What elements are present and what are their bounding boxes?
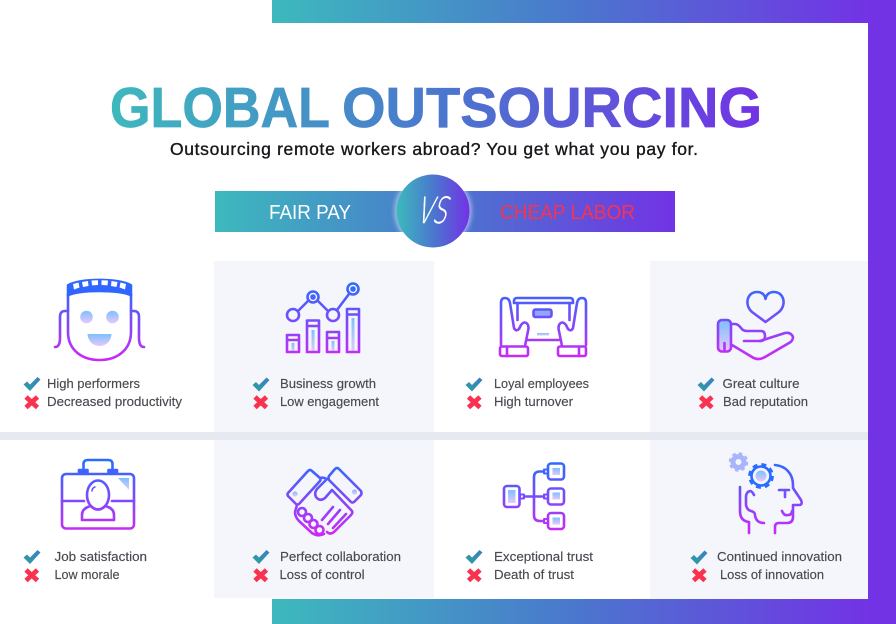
cross mark xyxy=(694,570,705,580)
text: low engagement: Low engagement xyxy=(280,394,379,409)
text: business growth: Business growth xyxy=(280,376,376,391)
text: great culture: Great culture xyxy=(722,376,800,391)
vs badge: VS xyxy=(413,190,456,232)
text: loss of control: Loss of control xyxy=(280,567,365,582)
text: bad reputation: Bad reputation xyxy=(723,394,808,409)
panel background xyxy=(214,261,434,432)
cross mark xyxy=(26,570,38,580)
panel background xyxy=(214,440,434,598)
top gradient bar xyxy=(272,0,896,23)
check mark xyxy=(466,378,482,392)
title: OUTSOURCING xyxy=(342,76,762,140)
panel: great culture xyxy=(650,261,868,432)
text: job satisfaction: Job satisfaction xyxy=(54,549,147,564)
bottom gradient bar xyxy=(272,599,868,624)
panel background xyxy=(650,440,868,599)
versus banner xyxy=(215,172,675,250)
text: death of trust: Death of trust xyxy=(494,567,574,582)
panel: continued innovation xyxy=(650,440,868,599)
check mark xyxy=(252,550,270,564)
check mark xyxy=(690,550,708,564)
check mark xyxy=(24,377,40,391)
cross mark xyxy=(255,570,266,580)
text: loyal employees: Loyal employees xyxy=(494,376,589,391)
text: decreased productivity: Decreased productivity xyxy=(47,394,183,409)
text: continued innovation: Continued innovation xyxy=(717,549,842,564)
text: high performers: High performers xyxy=(47,376,140,391)
icon: face xyxy=(55,279,144,360)
icon: briefcase portrait xyxy=(62,460,134,528)
icon: org tree xyxy=(504,464,564,529)
icon: handshake xyxy=(288,468,362,535)
text: high turnover: High turnover xyxy=(494,394,574,409)
right gradient bar xyxy=(868,0,896,624)
subtitle: Outsourcing remote workers abroad? You get what you pay for. xyxy=(170,139,698,159)
check mark xyxy=(698,378,714,392)
label: fair pay: FAIR PAY xyxy=(269,202,351,224)
text: exceptional trust: Exceptional trust xyxy=(494,549,593,564)
label: cheap labor: CHEAP LABOR xyxy=(500,202,635,224)
cross mark xyxy=(26,397,38,408)
cross mark xyxy=(255,397,266,408)
panel: loyal employees xyxy=(466,298,589,409)
icon: hands holding box xyxy=(500,298,586,356)
title xyxy=(110,76,762,140)
banner bar xyxy=(215,191,675,232)
text: loss of innovation: Loss of innovation xyxy=(720,567,824,582)
cross mark xyxy=(468,570,480,580)
row divider xyxy=(0,432,868,440)
icon: head with gears xyxy=(730,454,802,533)
panel: business growth xyxy=(214,261,434,432)
title: GLOBAL xyxy=(110,76,330,140)
text: low morale: Low morale xyxy=(54,567,120,582)
icon: hand with heart xyxy=(718,292,793,359)
panel: job satisfaction xyxy=(24,460,147,582)
check mark xyxy=(252,378,270,392)
panel: perfect collaboration xyxy=(214,440,434,598)
cross mark xyxy=(700,397,712,408)
icon: growth chart xyxy=(287,284,359,352)
panel: exceptional trust xyxy=(466,464,593,582)
check mark xyxy=(24,550,40,564)
text: perfect collaboration: Perfect collaboration xyxy=(280,549,401,564)
vs badge xyxy=(394,172,472,250)
panel: high performers xyxy=(24,279,183,409)
cross mark xyxy=(468,397,480,408)
panel background xyxy=(650,261,868,432)
check mark xyxy=(466,550,482,564)
